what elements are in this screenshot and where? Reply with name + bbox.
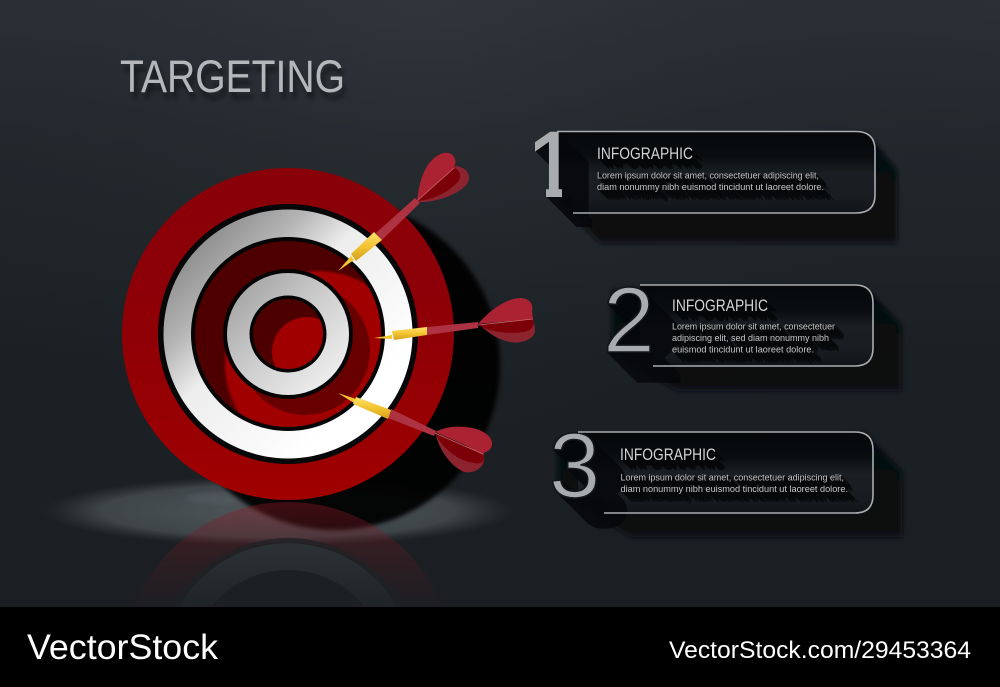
panel 3 xyxy=(549,415,902,537)
panel 2 outline xyxy=(640,285,873,366)
panel 2 heading and copy xyxy=(672,297,835,354)
panel 3 long shadow xyxy=(558,434,902,537)
panel 2 box xyxy=(640,285,873,366)
title: TARGETING xyxy=(120,51,345,102)
panel 2 heading and copy: Lorem ipsum dolor sit amet, consectetuer xyxy=(672,320,835,332)
number 2: 2 xyxy=(603,268,655,372)
panel 1 heading and copy: diam nonummy nibh euismod tincidunt ut laoreet dolore. xyxy=(597,181,824,192)
target shadow xyxy=(170,200,500,530)
panel 3 heading and copy: diam nonummy nibh euismod tincidunt ut laoreet dolore. xyxy=(620,483,848,494)
panel 1 heading and copy: Lorem ipsum dolor sit amet, consectetuer adipiscing elit, xyxy=(597,170,819,180)
panel 2 xyxy=(603,268,901,391)
panel 2 long shadow xyxy=(612,287,901,391)
panel 1 heading and copy xyxy=(597,145,824,192)
panel 3 heading and copy: Lorem ipsum dolor sit amet, consectetuer adipiscing elit, xyxy=(620,472,844,482)
target reflection xyxy=(134,502,442,607)
panel 2 heading and copy: adipiscing elit, sed diam nonummy nibh xyxy=(672,332,829,343)
inner red disc with shadow xyxy=(191,237,385,431)
dart 2 xyxy=(374,298,535,343)
panel 1 xyxy=(535,130,899,245)
footer bar xyxy=(0,607,1000,687)
bullseye xyxy=(250,296,326,372)
target board xyxy=(122,168,454,500)
panel 3 box xyxy=(578,432,873,513)
footer image id: VectorStock.com/29453364 xyxy=(669,637,971,664)
panel 3 outline xyxy=(578,432,873,513)
panel 3 heading and copy: INFOGRAPHIC xyxy=(620,446,716,464)
number 3: 3 xyxy=(549,415,600,517)
footer brand: VectorStock xyxy=(27,627,218,667)
second white ring xyxy=(223,269,353,399)
dart 3 xyxy=(338,393,492,472)
number 1: 1 xyxy=(526,112,578,217)
floor light ellipse xyxy=(42,476,514,546)
white ring xyxy=(158,204,418,464)
panel 1 long shadow xyxy=(562,133,897,243)
panel 1 box xyxy=(557,132,875,213)
panel 2 heading and copy: euismod tincidunt ut laoreet dolore. xyxy=(672,344,814,354)
outer red ring xyxy=(122,168,454,500)
panel 1 outline xyxy=(557,132,875,213)
panel 3 heading and copy xyxy=(620,446,848,494)
panel 2 heading and copy: INFOGRAPHIC xyxy=(672,297,768,315)
dart 1 xyxy=(338,153,469,271)
panel 1 heading and copy: INFOGRAPHIC xyxy=(597,145,693,163)
